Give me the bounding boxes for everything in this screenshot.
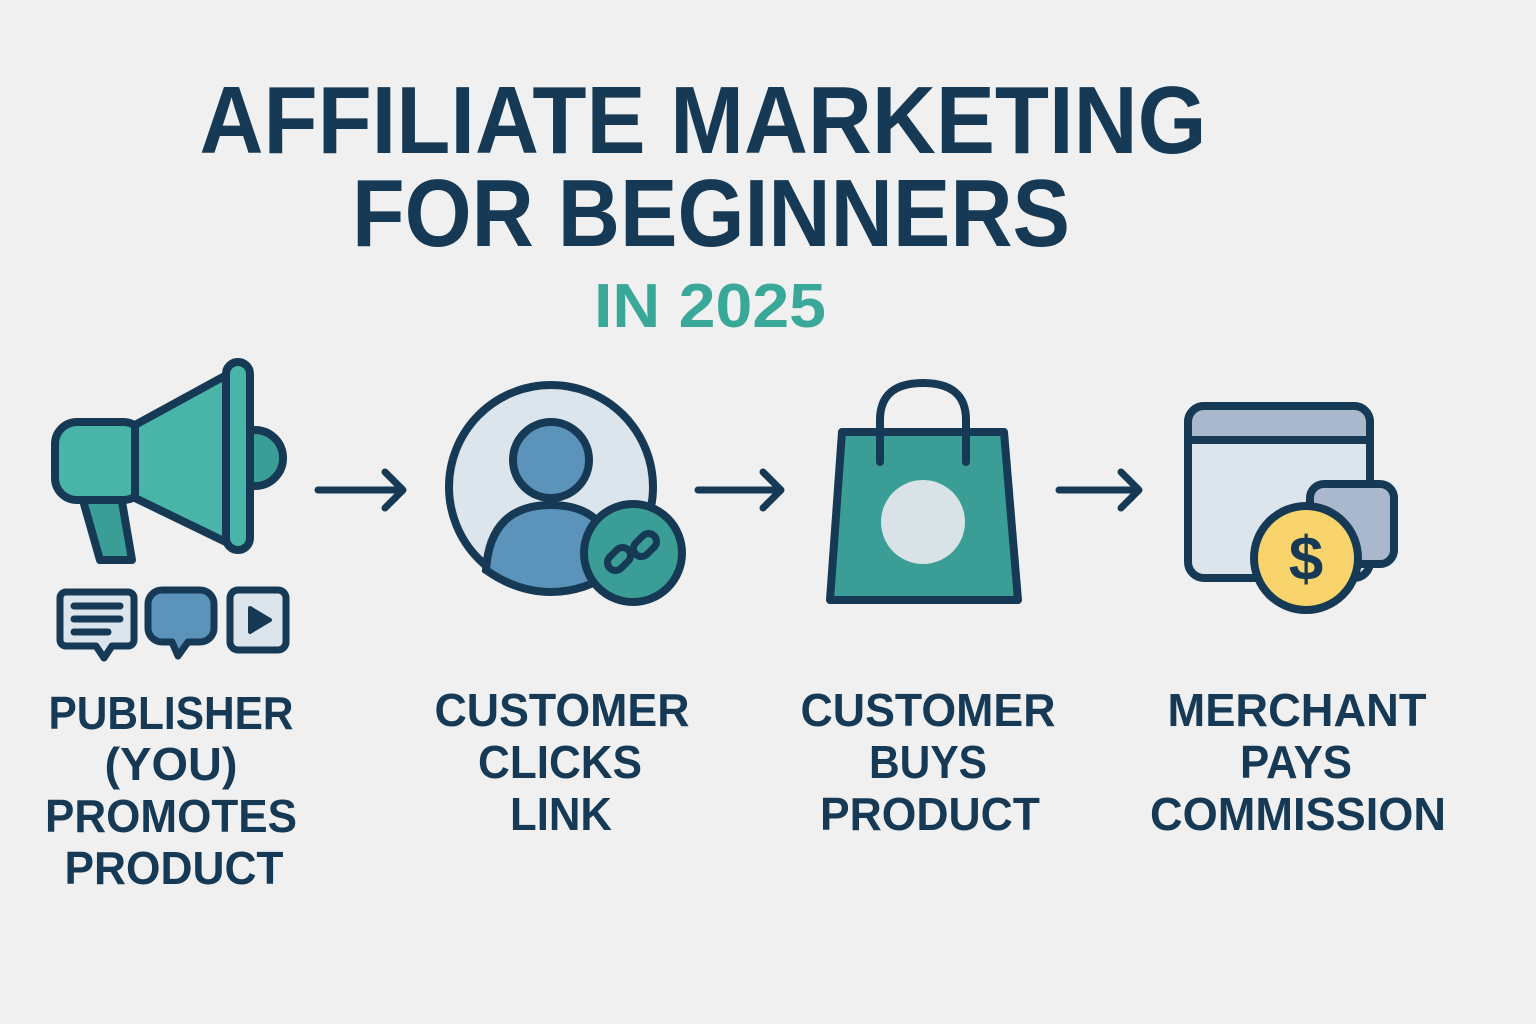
label: step 3 [800, 684, 1056, 840]
icon: wallet with coin: $ [1289, 525, 1323, 594]
label: step 2: CUSTOMER [434, 684, 690, 736]
label: step 1 [45, 687, 297, 894]
label: step 4: COMMISSION [1150, 788, 1446, 840]
icons: content types [60, 590, 286, 658]
label: step 1: PROMOTES [45, 790, 297, 842]
label: step 3: PRODUCT [820, 788, 1040, 840]
label: step 2: CLICKS [478, 736, 642, 788]
label: step 4: PAYS [1240, 736, 1352, 788]
label: step 3: BUYS [869, 736, 987, 788]
label: step 2 [434, 684, 690, 840]
label: step 1: PRODUCT [64, 842, 284, 894]
icon: wallet with coin [1188, 406, 1394, 610]
label: step 1: PUBLISHER [48, 687, 294, 739]
icon: megaphone [55, 362, 283, 560]
label: step 4 [1150, 684, 1446, 840]
title: AFFILIATE MARKETING [200, 67, 1206, 174]
arrows [318, 472, 1139, 508]
title: FOR BEGINNERS [352, 160, 1070, 267]
label: step 4: MERCHANT [1168, 684, 1426, 736]
icon: customer with link [449, 385, 682, 602]
icon: shopping bag [830, 383, 1018, 600]
title [200, 67, 1206, 267]
label: step 1: (YOU) [104, 738, 238, 790]
label: step 3: CUSTOMER [800, 684, 1056, 736]
label: step 2: LINK [510, 788, 612, 840]
subtitle: IN 2025 [594, 272, 826, 341]
